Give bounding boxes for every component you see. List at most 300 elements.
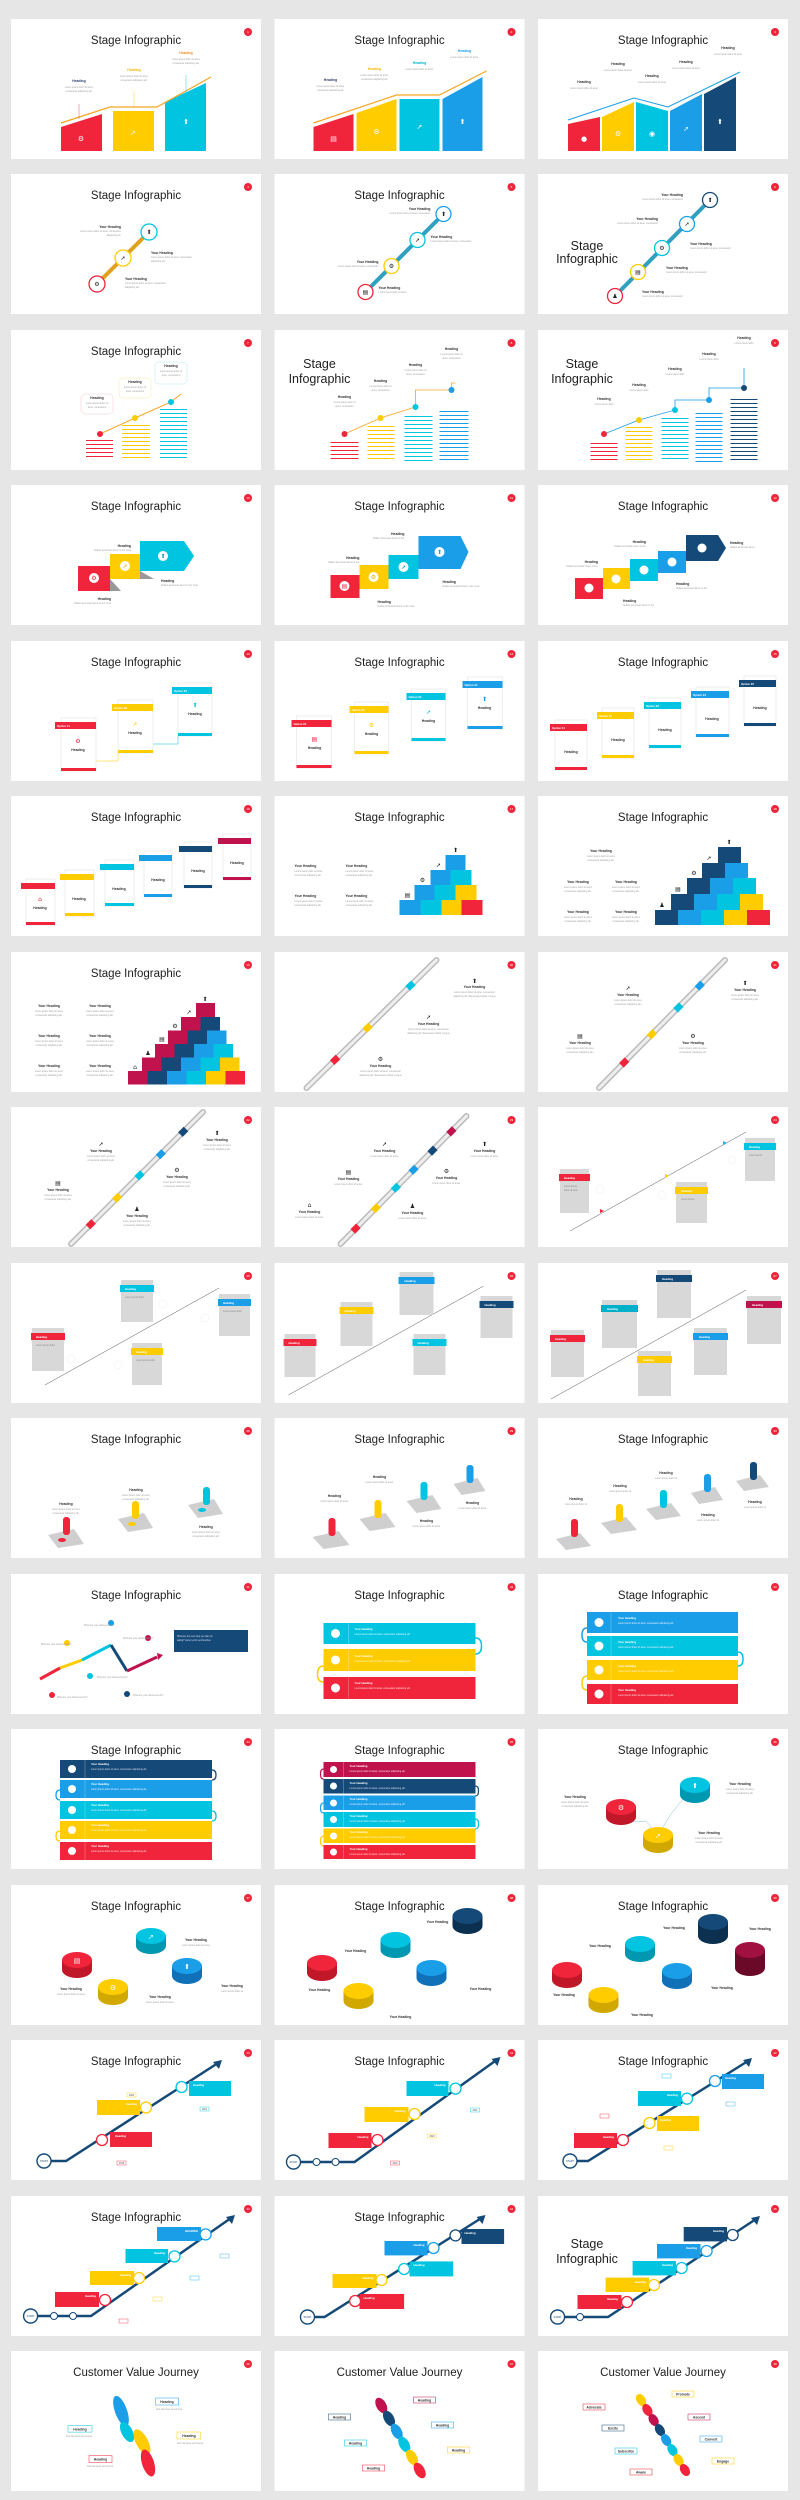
slide 28: three pedestals [11, 1418, 261, 1558]
roadmap: START [27, 2315, 35, 2318]
slide 8: four coin stacks: amet, consectetur [371, 389, 390, 392]
step arrow: Nullam accumsan lorem in dui. [676, 587, 708, 590]
bar chart: Heading [72, 79, 86, 83]
labels: Heading [367, 2466, 380, 2470]
pedestals: Heading [328, 1494, 341, 1498]
text blocks: Your Heading [370, 1064, 391, 1068]
title: Stage [303, 357, 336, 371]
text blocks: Your Heading [89, 1034, 111, 1038]
text blocks: ⚙ [174, 1167, 180, 1174]
labels: Heading [333, 2416, 346, 2420]
badge [244, 650, 252, 658]
labels: What are your achievements? [133, 1694, 164, 1697]
labels: Heading [436, 2424, 449, 2428]
text blocks: Your Heading [294, 894, 316, 898]
banners [582, 1612, 743, 1704]
coin stacks [342, 383, 456, 461]
text blocks: Lorem ipsum dolor sit amet, [203, 1144, 232, 1147]
bar chart: Lorem ipsum dolor sit amet, [172, 58, 201, 61]
roadmap: 2019 [119, 2163, 125, 2165]
banners [318, 1623, 482, 1699]
slide 8: four coin stacks: Lorem ipsum dolor sit [370, 385, 392, 388]
staircase [400, 847, 482, 915]
circle chain: Your Heading [378, 286, 400, 290]
pedestals: Lorem ipsum dolor sit [655, 1477, 677, 1480]
label boxes: Heading [564, 1176, 575, 1180]
text blocks: consectetur adipiscing elit. [36, 1044, 63, 1047]
text blocks: consectetur adipiscing elit. [45, 1198, 72, 1201]
labels: Subscribe [618, 2450, 634, 2454]
label boxes: Heading [288, 1341, 300, 1345]
circle chain: Your Heading [357, 260, 378, 264]
step arrow: Heading [118, 544, 131, 548]
badge: 6 [774, 185, 776, 189]
text blocks: consectetur adipiscing elit. [615, 1003, 642, 1006]
title: Stage Infographic [618, 1745, 708, 1757]
badge [771, 183, 779, 191]
text blocks: Lorem ipsum dolor sit amet, [564, 886, 593, 889]
bar chart: consectetur adipiscing elit. [121, 79, 148, 82]
banners: Your Heading [618, 1616, 636, 1620]
option cards: ➚ [132, 721, 138, 728]
text blocks: Your Heading [567, 910, 589, 914]
slide 7: three coin stacks: Heading [90, 396, 104, 400]
badge: 15 [773, 652, 777, 656]
timeline line [551, 1290, 746, 1399]
bar chart: Heading [645, 74, 659, 78]
circle chain: Lorem ipsum dolor sit amet, consectetur [338, 265, 379, 268]
option cards: Heading [72, 897, 86, 901]
badge: 10 [246, 496, 250, 500]
text blocks: Your Heading [47, 1188, 69, 1192]
circle chain [338, 206, 472, 300]
circle chain: Lorem ipsum dolor sit amet, consectetur [642, 198, 683, 201]
badge [771, 2205, 779, 2213]
labels [66, 2398, 204, 2468]
slide 8: four coin stacks: Heading [409, 363, 422, 367]
badge [508, 650, 516, 658]
bar chart: Heading [611, 62, 625, 66]
option cards: ⬆ [482, 696, 487, 703]
banners: Your Heading [354, 1627, 373, 1631]
text blocks: Lorem ipsum dolor sit amet, consectetur [360, 1070, 401, 1073]
labels: Heading [73, 2428, 87, 2432]
labels: Heading [160, 2400, 174, 2404]
slide 44: roadmap with five stages [274, 2196, 524, 2336]
roadmap: Heading [126, 2102, 137, 2106]
text blocks: Your Heading [374, 1149, 395, 1153]
text blocks: Lorem ipsum dolor sit amet, [564, 916, 593, 919]
badge: 42 [773, 2051, 777, 2055]
tube [599, 960, 725, 1088]
labels: Ascend [693, 2416, 705, 2420]
banners: Your Heading [618, 1640, 636, 1644]
badge: 21 [773, 963, 777, 967]
text blocks: Your Heading [126, 1214, 148, 1218]
bar chart: consectetur adipiscing elit. [173, 62, 200, 65]
slide 7: three coin stacks [11, 330, 261, 470]
title: Stage [571, 239, 603, 253]
title: Stage Infographic [618, 1901, 708, 1913]
slide 33: four banner rows [538, 1574, 788, 1714]
title: Stage Infographic [91, 1434, 181, 1446]
text blocks [294, 864, 374, 907]
title: Infographic [289, 372, 350, 386]
option cards: ⚙ [75, 738, 81, 745]
circle chain: Your Heading [666, 266, 688, 270]
circle chain: Lorem ipsum dolor sit amet, consectetur [430, 240, 472, 243]
title: Stage Infographic [91, 1901, 181, 1913]
label boxes: Lorem ipsum dolor [223, 1310, 242, 1313]
slide 15: five option cards [538, 641, 788, 781]
bar chart: Lorem ipsum dolor sit amet, [360, 74, 389, 77]
label boxes: Heading [699, 1335, 710, 1339]
text blocks: Lorem ipsum dolor sit amet, [44, 1194, 73, 1197]
badge [508, 1583, 516, 1591]
circle chain: ➚ [415, 237, 420, 244]
cylinders: Lorem ipsum dolor sit amet, [726, 1788, 755, 1791]
cylinders: Lorem ipsum dolor sit amet, [561, 1801, 590, 1804]
slide 8: four coin stacks [274, 330, 524, 470]
pedestals: Heading [373, 1475, 386, 1479]
slide 9: five coin stacks: Heading [668, 367, 682, 371]
option cards: Heading [112, 887, 126, 891]
staircase: ➚ [186, 1009, 192, 1016]
pedestals: Lorem ipsum dolor sit [609, 1490, 631, 1493]
labels: Excite [608, 2426, 618, 2430]
text blocks [35, 1004, 115, 1077]
text blocks: Lorem ipsum dolor sit amet, [370, 1155, 399, 1158]
title: Stage Infographic [91, 2056, 181, 2068]
labels [41, 1624, 164, 1699]
staircase: ⌂ [133, 1064, 137, 1071]
cylinders: Lorem ipsum dolor sit amet, [57, 1993, 86, 1996]
roadmap: 2021 [202, 2109, 208, 2111]
text blocks: ▤ [55, 1180, 61, 1187]
text blocks: ▤ [346, 1169, 351, 1176]
badge: 23 [510, 1118, 513, 1122]
circle chain: adipiscing elit. [107, 234, 121, 237]
text blocks: Your Heading [299, 1210, 320, 1214]
cylinders: Your Heading [470, 1987, 491, 1991]
badge: 5 [511, 185, 513, 189]
circle chain: ➚ [684, 221, 690, 228]
text blocks: Lorem ipsum dolor sit amet, [294, 900, 323, 903]
badge [244, 1738, 252, 1746]
roadmap: START [304, 2316, 312, 2319]
text blocks: Lorem ipsum dolor sit amet, [334, 1183, 363, 1186]
callout box: What are the next step you plan on [177, 1635, 213, 1638]
badge: 37 [246, 1896, 250, 1900]
badge: 3 [774, 30, 776, 34]
pedestals: consectetur adipiscing elit. [123, 1498, 150, 1501]
badge: 34 [246, 1740, 250, 1744]
bar chart: ● [581, 135, 587, 143]
cylinders [57, 1928, 243, 2005]
bar chart: ⚙ [78, 135, 84, 143]
cylinders: Your Heading [427, 1920, 448, 1924]
text blocks [566, 980, 760, 1054]
text blocks: Lorem ipsum dolor sit amet, [432, 1182, 461, 1185]
roadmap: 2019 [392, 2163, 398, 2165]
badge: 44 [510, 2207, 513, 2211]
cylinders: Lorem ipsum dolor sit amet, [695, 1837, 724, 1840]
option cards [55, 683, 212, 771]
text blocks: Your Heading [206, 1138, 228, 1142]
cylinders: Lorem ipsum dolor sit [221, 1990, 243, 1993]
circle chain [608, 192, 731, 304]
text blocks: Lorem ipsum dolor sit amet, [86, 1040, 115, 1043]
bar chart: ◉ [649, 130, 655, 138]
cylinders [307, 1908, 491, 2019]
text blocks: ➚ [98, 1141, 104, 1148]
banners: Your Heading [350, 1797, 368, 1801]
badge: 4 [247, 185, 249, 189]
banners: Lorem ipsum dolor sit amet, consectetur adipiscing elit. [350, 1803, 406, 1806]
slide 9: five coin stacks: Heading [597, 397, 611, 401]
slide 27: six label boxes on line [538, 1263, 788, 1403]
bar chart: Heading [179, 51, 193, 55]
text blocks: ⚙ [690, 1033, 696, 1040]
step arrow: Heading [161, 579, 174, 583]
text blocks [359, 978, 496, 1077]
option cards: Heading [33, 906, 47, 910]
label boxes: dolor sit amet [564, 1189, 578, 1192]
bar chart: Lorem ipsum dolor sit amet, [65, 86, 94, 89]
step arrow: ⬆ [160, 553, 166, 560]
badge [244, 1583, 252, 1591]
slide 12: five step arrow [538, 485, 788, 625]
step arrow: Nullam accumsan lorem in dui. [623, 604, 655, 607]
slide 29: four pedestals [274, 1418, 524, 1558]
label boxes: Lorem ipsum [681, 1198, 694, 1201]
bar chart: ▤ [330, 135, 337, 143]
banners: Lorem ipsum dolor sit amet, consectetur adipiscing elit. [350, 1787, 406, 1790]
text blocks: Your Heading [436, 1176, 457, 1180]
step arrow: Nullam accumsan lorem [730, 546, 755, 549]
circle chain: Your Heading [642, 290, 664, 294]
slide 8: four coin stacks: amet, consectetur [335, 405, 354, 408]
slide 8: four coin stacks: Lorem ipsum dolor sit [334, 401, 356, 404]
cylinders: Your Heading [564, 1795, 586, 1799]
banners: Your Heading [350, 1814, 368, 1818]
cylinders: ➚ [148, 1933, 154, 1941]
banners: Lorem ipsum dolor sit amet, consectetur adipiscing elit. [618, 1670, 674, 1673]
badge: 18 [773, 807, 777, 811]
slide 8: four coin stacks: Heading [445, 347, 458, 351]
step arrow: ▤ [342, 583, 347, 590]
step arrow [567, 535, 755, 607]
text blocks: Lorem ipsum dolor sit amet, [398, 1217, 427, 1220]
text blocks: consectetur adipiscing elit. [204, 1148, 231, 1151]
label boxes: Heading [223, 1301, 234, 1305]
labels: Aware [636, 2470, 646, 2474]
bar chart: consectetur adipiscing elit. [361, 78, 388, 81]
cylinders: Your Heading [589, 1944, 611, 1948]
title: Customer Value Journey [73, 2367, 199, 2379]
circle chain: ⚙ [659, 245, 665, 252]
badge [244, 961, 252, 969]
option cards: ⌂ [38, 896, 42, 903]
step arrow: Heading [378, 600, 391, 604]
roadmap: Heading [662, 2263, 673, 2267]
slide 1: three-bar stage chart [11, 19, 261, 159]
labels [328, 2397, 470, 2471]
pedestals: Lorem ipsum dolor sit amet, [320, 1500, 349, 1503]
badge [771, 1116, 779, 1124]
labels: Engage [717, 2460, 729, 2464]
coin stacks [601, 368, 747, 462]
badge: 27 [773, 1274, 777, 1278]
badge: 31 [246, 1585, 250, 1589]
label boxes: Lorem ipsum [749, 1154, 762, 1157]
title: Stage [566, 357, 598, 371]
circle chain: ➚ [120, 255, 126, 262]
roadmap: Heading [115, 2134, 126, 2138]
labels: Sed nisi lacus sed viverra [66, 2435, 93, 2438]
bar chart: Lorem ipsum dolor sit amet, [405, 68, 434, 71]
option cards: ▤ [312, 736, 317, 743]
label boxes: Heading [681, 1189, 692, 1193]
text blocks: Lorem ipsum dolor sit amet, [35, 1070, 64, 1073]
option cards: ⬆ [192, 702, 198, 709]
option cards: Heading [611, 738, 625, 742]
step arrow: ➚ [122, 563, 128, 570]
badge: 24 [773, 1118, 777, 1122]
bar chart: ➚ [683, 125, 689, 133]
slide 32: three banner rows [274, 1574, 524, 1714]
badge [244, 2360, 252, 2368]
badge [508, 1427, 516, 1435]
bar chart [314, 49, 486, 151]
text blocks: Lorem ipsum dolor sit amet, [35, 1040, 64, 1043]
text blocks: Your Heading [734, 988, 756, 992]
labels: Convert [705, 2438, 718, 2442]
labels: Sed nisi lacus sed viverra [156, 2408, 183, 2411]
slide 41: roadmap with three stages (left boxes) [274, 2040, 524, 2180]
staircase: ♟ [659, 902, 665, 909]
slide 39: six cylinders [538, 1885, 788, 2025]
roadmap: 2021 [472, 2110, 478, 2112]
slide 21: tube with four bands [538, 952, 788, 1092]
banners: Lorem ipsum dolor sit amet, consectetur adipiscing elit. [354, 1687, 411, 1690]
banners [56, 1760, 216, 1860]
banners: Your Heading [350, 1781, 368, 1785]
badge [244, 28, 252, 36]
cylinders: Your Heading [345, 1949, 366, 1953]
slide 8: four coin stacks: amet, consectetur [442, 357, 461, 360]
text blocks: Your Heading [90, 1149, 112, 1153]
labels: Sed nisi lacus sed viverra [177, 2442, 204, 2445]
cylinders: Your Heading [60, 1987, 82, 1991]
badge: 40 [246, 2051, 250, 2055]
text blocks: consectetur adipiscing elit. [87, 1014, 114, 1017]
pedestals: Lorem ipsum dolor sit amet, [365, 1481, 394, 1484]
title: Infographic [551, 372, 613, 386]
circle chain: Your Heading [151, 251, 173, 255]
pedestals: Lorem ipsum dolor sit [744, 1506, 766, 1509]
badge [771, 805, 779, 813]
text blocks: Lorem ipsum dolor sit amet, [612, 916, 641, 919]
text blocks: ♟ [134, 1206, 140, 1213]
labels: Advocate [586, 2406, 602, 2410]
step arrow: ⚙ [91, 575, 97, 582]
badge: 47 [510, 2362, 513, 2366]
text blocks: ⬆ [482, 1141, 487, 1148]
option cards: Option 03 [408, 695, 422, 699]
roadmap: 2020 [429, 2136, 435, 2138]
step arrow: Nullam accumsan lorem in dui. [567, 565, 598, 568]
slide 34: five banner rows [11, 1729, 261, 1869]
option cards [292, 677, 502, 768]
text blocks: consectetur adipiscing elit. [732, 998, 759, 1001]
text blocks: Lorem ipsum dolor sit amet, [295, 1216, 324, 1219]
option cards: ➚ [426, 709, 431, 716]
text blocks: Lorem ipsum dolor sit amet, [346, 900, 374, 903]
circle chain: adipiscing elit. [125, 286, 140, 289]
roadmap: Heading [464, 2231, 476, 2235]
slide 5: four circle chain [274, 174, 524, 314]
slide 48: customer value journey, eight stages [538, 2351, 788, 2491]
staircase: ▤ [159, 1036, 165, 1043]
banners: Lorem ipsum dolor sit amet, consectetur adipiscing elit. [91, 1788, 147, 1791]
slide 9: five coin stacks: Lorem ipsum dolor [699, 358, 719, 361]
badge [508, 1738, 516, 1746]
option cards: Option 04 [693, 693, 706, 697]
badge: 39 [773, 1896, 777, 1900]
pedestals: Lorem ipsum dolor sit amet, [458, 1507, 487, 1510]
slide 46: customer value journey, four stages [11, 2351, 261, 2491]
slide 26: five label boxes on line [274, 1263, 524, 1403]
text blocks: consectetur adipiscing elit. [164, 1185, 191, 1188]
banners: Lorem ipsum dolor sit amet, consectetur adipiscing elit. [91, 1829, 147, 1832]
banners: Lorem ipsum dolor sit amet, consectetur adipiscing elit. [91, 1809, 147, 1812]
badge: 28 [246, 1429, 250, 1433]
bar chart: ➚ [130, 129, 136, 137]
title: Stage Infographic [618, 657, 708, 669]
bar chart: consectetur adipiscing elit. [317, 89, 344, 92]
step arrow: Nullam accumsan lorem in dui. Cras [74, 602, 112, 605]
cylinders: Your Heading [149, 1995, 171, 1999]
label boxes [559, 1138, 776, 1223]
roadmap: Heading [413, 2243, 425, 2247]
circle chain: Your Heading [125, 277, 147, 281]
labels: Heading [452, 2448, 465, 2452]
callout box: taking? Lorem enim sed faucibus [177, 1639, 212, 1642]
title: Stage Infographic [618, 1590, 708, 1602]
bar chart: Lorem ipsum dolor sit amet, [316, 85, 345, 88]
title: Stage Infographic [618, 1434, 708, 1446]
badge: 33 [773, 1585, 777, 1589]
bar chart: ⚙ [373, 128, 380, 136]
badge [508, 339, 516, 347]
labels: What are your achievements? [57, 1696, 88, 1699]
step arrow: Heading [98, 597, 111, 601]
step arrow: ⬆ [437, 549, 442, 556]
staircase: ➚ [436, 862, 441, 869]
title: Infographic [556, 252, 618, 266]
cylinders: ⚙ [618, 1804, 624, 1812]
badge: 12 [773, 496, 777, 500]
bar chart: Lorem ipsum dolor sit amet, [450, 56, 479, 59]
cylinders: Your Heading [663, 1926, 685, 1930]
banners: Your Heading [618, 1664, 636, 1668]
badge [771, 1272, 779, 1280]
text blocks: Lorem ipsum dolor sit amet, [470, 1155, 499, 1158]
roadmap: Heading [667, 2093, 678, 2097]
text blocks: consectetur adipiscing elit. [294, 874, 322, 877]
circle chain: ♟ [612, 293, 618, 300]
